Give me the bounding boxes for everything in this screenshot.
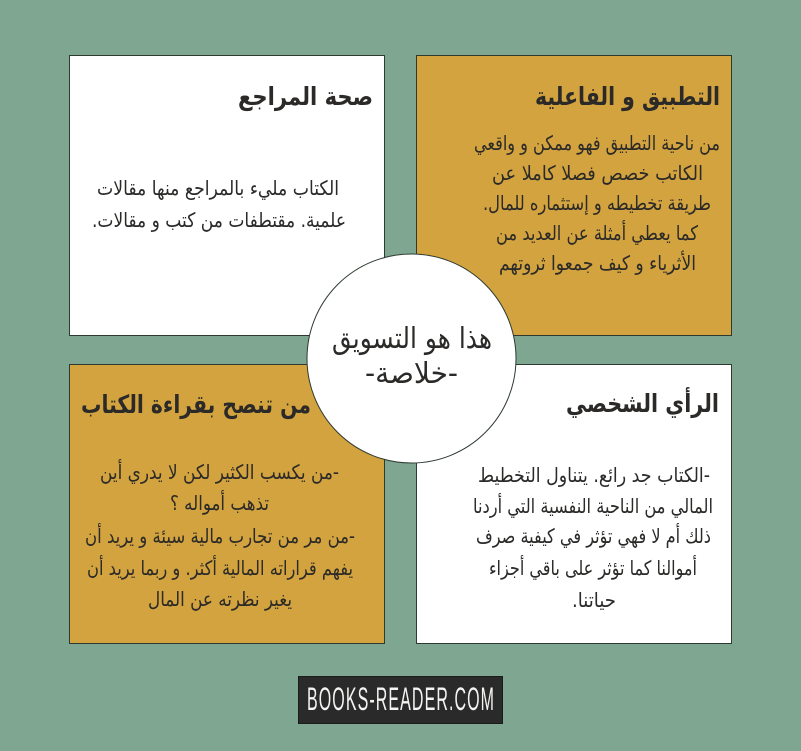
text block: application body bbox=[474, 131, 720, 275]
heading: personal opinion: الرأي الشخصي bbox=[566, 387, 719, 419]
heading: soundness of references: صحة المراجع bbox=[238, 82, 373, 112]
panel: application and effectiveness bbox=[416, 56, 732, 336]
text block: application body: طريقة تخطيطه و إستثماره للمال. bbox=[483, 191, 711, 216]
text block: application body: كما يعطي أمثلة عن العديد من bbox=[496, 220, 698, 246]
text block: opinion body: أموالنا كما تؤثر على باقي أجزاء bbox=[489, 555, 697, 581]
heading: who should read the book: من تنصح بقراءة الكتاب bbox=[81, 390, 311, 420]
subtitle: summary: -خلاصة- bbox=[365, 356, 458, 390]
text block: application body: الكاتب خصص فصلا كاملا عن bbox=[492, 161, 703, 185]
title: this is marketing: هذا هو التسويق bbox=[332, 321, 492, 355]
text block: audience body: يفهم قراراته المالية أكثر. و ربما يريد أن bbox=[87, 555, 353, 580]
website badge bbox=[298, 676, 502, 724]
text block: references body bbox=[92, 176, 346, 232]
text block: audience body: تذهب أمواله ؟ bbox=[170, 490, 269, 515]
text block: opinion body: ذلك أم لا فهي تؤثر في كيفية صرف bbox=[476, 523, 711, 549]
text block: opinion body: حياتنا. bbox=[572, 588, 616, 612]
text block: application body: من ناحية التطبيق فهو ممكن و واقعي bbox=[474, 131, 720, 156]
panel: personal opinion bbox=[416, 364, 732, 644]
text block: references body: علمية. مقتطفات من كتب و مقالات. bbox=[92, 208, 346, 232]
text block: audience body: -من مر من تجارب مالية سيئة و يريد أن bbox=[85, 523, 355, 548]
text block: audience body bbox=[85, 459, 355, 611]
panel: soundness of references bbox=[70, 56, 384, 336]
text block: opinion body bbox=[473, 463, 713, 612]
text block: opinion body: -الكتاب جد رائع. يتناول التخطيط bbox=[478, 463, 710, 487]
text block: application body: الأثرياء و كيف جمعوا ثروتهم bbox=[499, 251, 696, 275]
text block: audience body: -من يكسب الكثير لكن لا يدري أين bbox=[100, 459, 339, 485]
text block: opinion body: المالي من الناحية النفسية التي أردنا bbox=[473, 493, 713, 519]
panel: who should read the book bbox=[70, 364, 384, 644]
text block: audience body: يغير نظرته عن المال bbox=[148, 587, 292, 611]
heading: application and effectiveness: التطبيق و الفاعلية bbox=[535, 82, 720, 112]
text block: references body: الكتاب مليء بالمراجع منها مقالات bbox=[97, 176, 339, 201]
website address: BOOKS-READER.COM bbox=[307, 682, 494, 718]
central circle: title bbox=[307, 254, 516, 463]
